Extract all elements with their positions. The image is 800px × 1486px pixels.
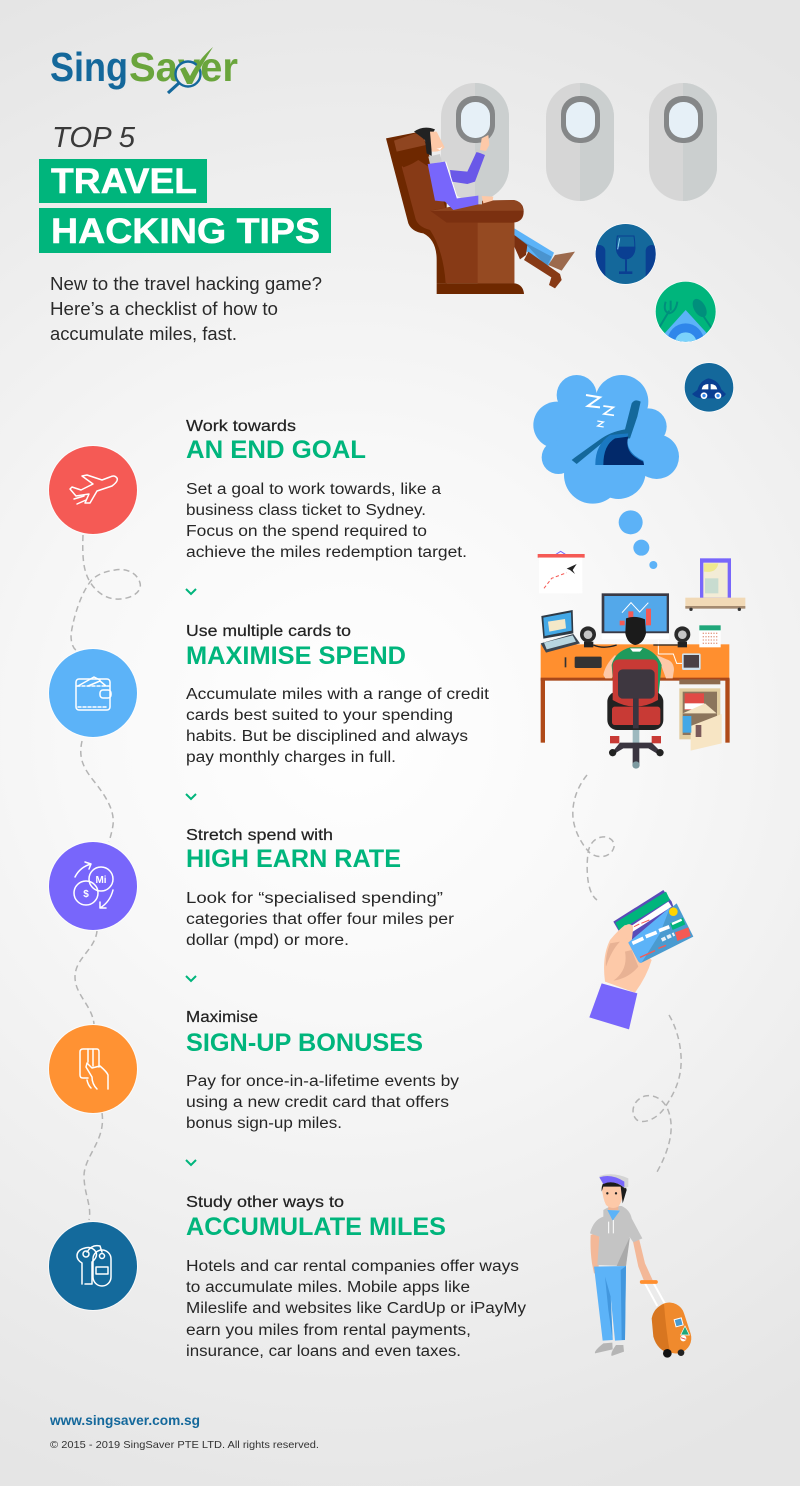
step 1 icon: plane bbox=[48, 445, 138, 535]
title banner: Travel: TRAVEL bbox=[51, 162, 197, 201]
illustration: person at desk bbox=[538, 551, 745, 769]
framed map on shelf bbox=[685, 558, 745, 611]
step 2 text: Use multiple cards to maximise spend: Use multiple cards to bbox=[186, 623, 351, 640]
step 4 text: Maximise sign-up bonuses: using a new credit card that offers bbox=[186, 1094, 449, 1111]
footer: website: www.singsaver.com.sg bbox=[49, 1413, 200, 1428]
step 3 text: Stretch spend with high earn rate: categories that offer four miles per bbox=[186, 911, 454, 928]
step 2 text: Use multiple cards to maximise spend: cards best suited to your spending bbox=[186, 707, 453, 724]
chevron 2 bbox=[186, 794, 196, 799]
step 3 text: Stretch spend with high earn rate: HIGH EARN RATE bbox=[186, 845, 401, 873]
illustration: traveller with suitcase bbox=[590, 1174, 695, 1358]
icon: fork and spoon meal bbox=[655, 281, 716, 342]
step 5 text: Study other ways to accumulate miles: Mileslife and websites like CardUp or iPayMy bbox=[186, 1300, 526, 1317]
intro text bbox=[50, 274, 322, 344]
dashed flight path: circle 2 to 3 bbox=[81, 741, 113, 842]
step 4 text: Maximise sign-up bonuses: Pay for once-in-a-lifetime events by bbox=[186, 1073, 459, 1090]
step 3 icon: miles and dollar exchange bbox=[48, 841, 138, 931]
step 5 text: Study other ways to accumulate miles bbox=[186, 1194, 526, 1360]
step 1 text: Work towards an end goal bbox=[186, 418, 467, 561]
dashed flight path: right lower bbox=[633, 1015, 681, 1172]
intro text: accumulate miles, fast. bbox=[50, 324, 237, 344]
heading: Top 5: TOP 5 bbox=[52, 122, 136, 154]
step 2 text: Use multiple cards to maximise spend bbox=[186, 623, 490, 766]
step 5 text: Study other ways to accumulate miles: to accumulate miles. Mobile apps like bbox=[186, 1279, 470, 1296]
step 1 text: Work towards an end goal: business class ticket to Sydney. bbox=[186, 502, 426, 519]
logo: SingSaver bbox=[50, 44, 238, 93]
step 5 text: Study other ways to accumulate miles: ACCUMULATE MILES bbox=[186, 1213, 446, 1241]
step 2 icon: wallet bbox=[48, 648, 138, 738]
icon: wine glass bbox=[593, 223, 658, 285]
footer: copyright: © 2015 - 2019 SingSaver PTE LTD. All rights reserved. bbox=[50, 1439, 319, 1451]
step 3 text: Stretch spend with high earn rate bbox=[186, 827, 454, 949]
illustration: thought cloud with seat bbox=[533, 375, 679, 569]
step 1 text: Work towards an end goal: Set a goal to work towards, like a bbox=[186, 481, 441, 498]
step 2 text: Use multiple cards to maximise spend: habits. But be disciplined and always bbox=[186, 728, 468, 745]
step 1 text: Work towards an end goal: Focus on the spend required to bbox=[186, 523, 427, 540]
dashed flight path: circle 1 to 2 bbox=[71, 535, 140, 651]
step 5 text: Study other ways to accumulate miles: Study other ways to bbox=[186, 1194, 344, 1211]
step 5 text: Study other ways to accumulate miles: insurance, car loans and even taxes. bbox=[186, 1343, 461, 1360]
intro text: New to the travel hacking game? bbox=[50, 274, 322, 294]
monitor bbox=[602, 593, 669, 639]
step 3 icon: miles and dollar exchange: Mi bbox=[95, 875, 107, 886]
step 2 text: Use multiple cards to maximise spend: pay monthly charges in full. bbox=[186, 749, 396, 766]
step 4 text: Maximise sign-up bonuses: bonus sign-up miles. bbox=[186, 1115, 342, 1132]
illustration: passenger in reclining seat bbox=[386, 128, 575, 294]
logo: SingSaver: Saver bbox=[129, 44, 238, 90]
calendar bbox=[699, 625, 721, 647]
desk bbox=[541, 644, 730, 743]
wall chart bbox=[538, 551, 585, 593]
dashed flight path: right upper bbox=[573, 775, 614, 900]
step 5 text: Study other ways to accumulate miles: earn you miles from rental payments, bbox=[186, 1322, 471, 1339]
laptop bbox=[541, 610, 580, 653]
step 1 text: Work towards an end goal: achieve the miles redemption target. bbox=[186, 544, 467, 561]
step 5 text: Study other ways to accumulate miles: Hotels and car rental companies offer ways bbox=[186, 1258, 519, 1275]
step 4 text: Maximise sign-up bonuses: SIGN-UP BONUSES bbox=[186, 1029, 423, 1057]
step 4 icon: hand holding card bbox=[48, 1024, 138, 1114]
step 3 icon: miles and dollar exchange: $ bbox=[83, 889, 89, 900]
step 3 text: Stretch spend with high earn rate: Look for “specialised spending” bbox=[186, 890, 443, 907]
icon: car bbox=[684, 362, 734, 412]
step 4 text: Maximise sign-up bonuses bbox=[186, 1009, 459, 1132]
step 1 text: Work towards an end goal: Work towards bbox=[186, 418, 296, 435]
logo: SingSaver: Sing bbox=[50, 44, 128, 90]
illustration: airplane windows bbox=[441, 83, 717, 201]
step 3 text: Stretch spend with high earn rate: Stretch spend with bbox=[186, 827, 333, 844]
chevron 4 bbox=[186, 1160, 196, 1165]
step 2 text: Use multiple cards to maximise spend: MAXIMISE SPEND bbox=[186, 642, 406, 670]
title banner: Hacking Tips: HACKING TIPS bbox=[51, 212, 320, 251]
step 4 text: Maximise sign-up bonuses: Maximise bbox=[186, 1009, 258, 1026]
intro text: Here’s a checklist of how to bbox=[50, 299, 278, 319]
dashed flight path: circle 3 to 4 bbox=[75, 931, 97, 1024]
cabinet bbox=[679, 679, 722, 751]
person on office chair bbox=[603, 617, 674, 769]
illustration: hand holding credit cards bbox=[589, 890, 693, 1029]
speakers bbox=[580, 626, 690, 647]
step 5 icon: key and tag bbox=[48, 1221, 138, 1311]
step 1 text: Work towards an end goal: AN END GOAL bbox=[186, 436, 366, 464]
chevron 3 bbox=[186, 976, 196, 981]
step 3 text: Stretch spend with high earn rate: dollar (mpd) or more. bbox=[186, 932, 349, 949]
dashed flight path: circle 4 to 5 bbox=[84, 1113, 103, 1220]
step 2 text: Use multiple cards to maximise spend: Accumulate miles with a range of credit bbox=[186, 686, 490, 703]
chevron 1 bbox=[186, 589, 196, 594]
keyboard and tablet bbox=[565, 640, 701, 670]
